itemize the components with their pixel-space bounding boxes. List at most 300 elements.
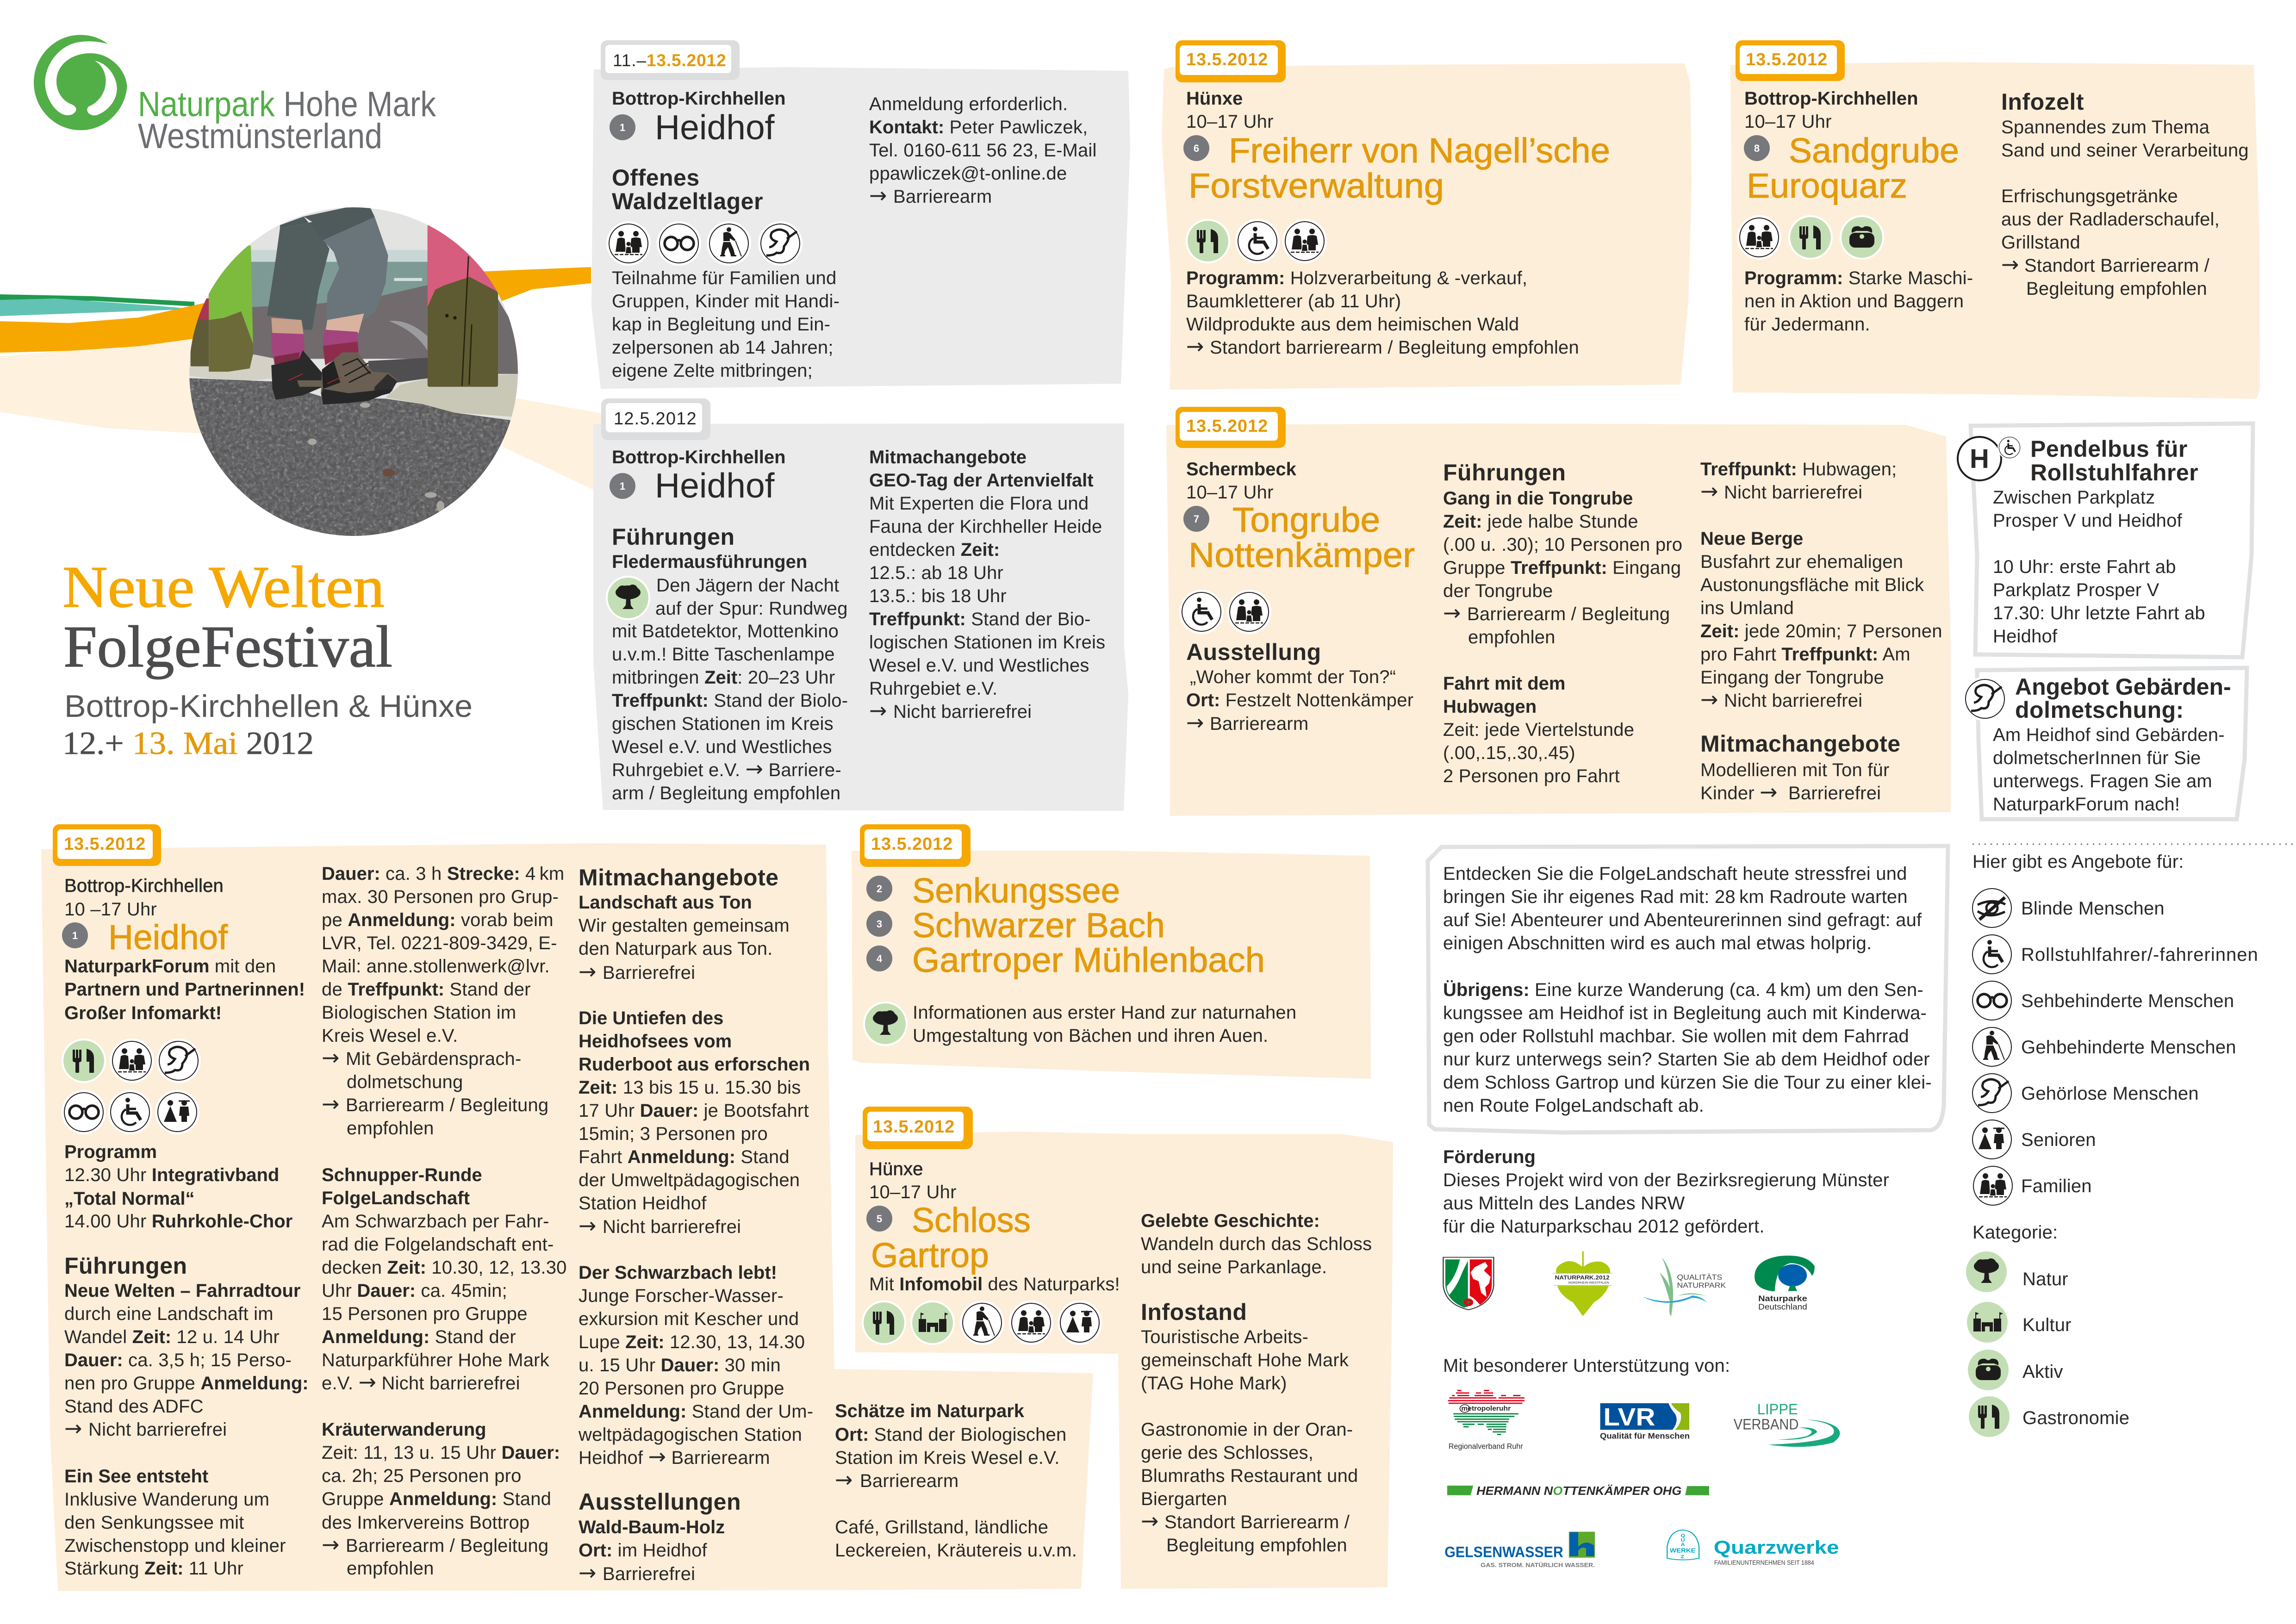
text: besondere Unterstützung: Mit besonderer Unterstützung von: bbox=[1443, 1356, 1730, 1376]
Förderung text bbox=[1443, 1147, 1889, 1237]
text block right: GEO-Tag der Artenvielfalt bbox=[869, 470, 1094, 491]
programme text bbox=[1744, 268, 1973, 335]
logo: Quarzwerke: U bbox=[1681, 1538, 1685, 1543]
number badges 2 3 4 bbox=[866, 876, 892, 971]
legend bbox=[1964, 844, 2296, 1439]
heading: Euroquarz bbox=[1747, 166, 1907, 205]
location: Bottrop-Kirchhellen bbox=[612, 447, 786, 467]
column 3 text: den Naturpark aus Ton. bbox=[579, 939, 772, 959]
intro text bbox=[64, 956, 305, 1023]
column 3 text: Der Schwarzbach lebt! bbox=[579, 1263, 777, 1283]
text: bringen Sie ihr eigenes Rad mit: 28 km Radroute warten bbox=[1443, 887, 1908, 907]
text block right: 13.5.: bis 18 Uhr bbox=[869, 586, 1007, 606]
legend item: blind bbox=[1970, 886, 2165, 930]
Treffpunkt and Neue Berge text: Barrierefrei bbox=[1788, 783, 1881, 803]
Führungen text: Zeit: jede Viertelstunde bbox=[1443, 720, 1634, 740]
text block left: zelpersonen ab 14 Jahren; bbox=[612, 337, 834, 358]
number badge 7: 7 bbox=[1194, 513, 1199, 525]
date tab bbox=[860, 824, 971, 867]
text: kungssee am Heidhof ist in Begleitung auch mit Kinderwa- bbox=[1443, 1003, 1927, 1023]
Führungen text: Gruppe Treffpunkt: Eingang bbox=[1443, 558, 1681, 578]
location and time: 10–17 Uhr bbox=[1186, 112, 1274, 132]
location and time: Hünxe bbox=[1186, 88, 1243, 109]
Treffpunkt and Neue Berge text: Mitmachangebote bbox=[1700, 731, 1901, 757]
logo: Naturparke Deutschland bbox=[1755, 1256, 1815, 1312]
date tab: 13.5.2012 bbox=[1186, 50, 1268, 69]
Führungen text bbox=[1443, 460, 1682, 786]
text: Informationen aus erster Hand zur naturnahen bbox=[913, 1002, 1296, 1023]
Programm text: 12.30 Uhr Integrativband bbox=[64, 1165, 279, 1185]
location and time: Bottrop-Kirchhellen bbox=[64, 876, 224, 896]
text block left: mitbringen Zeit: 20–23 Uhr bbox=[612, 667, 835, 688]
text: gen oder Rollstuhl machbar. Sie wollen mit dem Fahrrad bbox=[1443, 1026, 1909, 1046]
text column right: Wandeln durch das Schloss bbox=[1141, 1234, 1372, 1254]
Treffpunkt and Neue Berge text: ins Umland bbox=[1700, 598, 1794, 618]
legend heading: audiences: Hier gibt es Angebote für: bbox=[1972, 852, 2184, 872]
text: nur kurz unterwegs sein? Starten Sie ab dem Heidhof oder bbox=[1443, 1049, 1930, 1070]
text column right: Infostand bbox=[1141, 1299, 1247, 1325]
icons: family, glasses, walking, ear bbox=[606, 221, 803, 266]
dates: 12.+ 13. Mai 2012 bbox=[62, 726, 314, 761]
Treffpunkt and Neue Berge text: Nicht barrierefrei bbox=[1724, 691, 1862, 711]
column 2 text: dolmetschung bbox=[347, 1072, 463, 1092]
legend item: walking impaired: Gehbehinderte Menschen bbox=[2021, 1037, 2236, 1058]
panel: Senkungssee Schwarzer Bach Gartroper Mühlenbach bbox=[852, 824, 1371, 1079]
photo background bbox=[185, 204, 523, 541]
Schätze text: Schätze im Naturpark bbox=[835, 1401, 1025, 1421]
logo: LVR: Qualität für Menschen bbox=[1600, 1432, 1690, 1441]
icons row 1 and row 2 bbox=[62, 1039, 201, 1134]
Treffpunkt and Neue Berge text: pro Fahrt Treffpunkt: Am bbox=[1700, 644, 1910, 665]
legend item: deaf: Gehörlose Menschen bbox=[2021, 1083, 2199, 1104]
logo: Quarzwerke: A bbox=[1681, 1542, 1685, 1547]
logo: Naturparke Deutschland: Naturparke bbox=[1758, 1294, 1807, 1303]
Infozelt text: Erfrischungsgetränke bbox=[2001, 186, 2178, 206]
heading: Freiherr von Nagell’sche bbox=[1229, 131, 1610, 170]
logo: Qualitäts Naturpark: NATURPARK bbox=[1677, 1282, 1726, 1289]
subheading: Waldzeltlager bbox=[612, 188, 763, 214]
logo: Quarzwerke: Quarzwerke bbox=[1714, 1537, 1839, 1558]
column 2 text: Zeit: 11, 13 u. 15 Uhr Dauer: bbox=[322, 1443, 560, 1463]
date tab bbox=[863, 1107, 973, 1149]
logo: Lippe Verband: VERBAND bbox=[1734, 1416, 1798, 1432]
text: unterwegs. Fragen Sie am bbox=[1993, 771, 2212, 791]
text block right: Mitmachangebote bbox=[869, 447, 1027, 467]
icons: food, wheelchair, family bbox=[1186, 219, 1327, 263]
Führungen heading: Führungen bbox=[612, 524, 735, 550]
number badge 6 bbox=[1183, 135, 1209, 161]
date tab: 13.5.2012 bbox=[873, 1117, 955, 1137]
Treffpunkt and Neue Berge text: Treffpunkt: Hubwagen; bbox=[1700, 459, 1897, 479]
column 2 text: Barrierearm / Begleitung bbox=[346, 1095, 548, 1115]
legend item: deaf bbox=[1970, 1071, 2199, 1115]
heading: Schloss bbox=[912, 1201, 1031, 1239]
heading bbox=[1188, 500, 1415, 574]
logo: Naturpark Hohe Mark bbox=[34, 28, 436, 156]
text: Prosper V und Heidhof bbox=[1993, 510, 2183, 531]
date tab bbox=[53, 824, 161, 866]
column 2 text: Gruppe Anmeldung: Stand bbox=[322, 1489, 551, 1509]
legend item: culture bbox=[1965, 1300, 2072, 1344]
text: Übrigens: Eine kurze Wanderung (ca. 4 km) um den Sen- bbox=[1443, 979, 1923, 1000]
programme text: → bbox=[1186, 334, 1204, 359]
box: Gebärdendolmetschung bbox=[1963, 668, 2247, 819]
logo: LVR: LVR bbox=[1603, 1403, 1655, 1431]
Führungen text: Hubwagen bbox=[1443, 697, 1537, 717]
programme text: Standort barrierearm / Begleitung empfohlen bbox=[1210, 337, 1579, 358]
text: Am Heidhof sind Gebärden- bbox=[1993, 725, 2225, 745]
column 3 text: Ort: im Heidhof bbox=[579, 1540, 708, 1561]
logo: Lippe Verband bbox=[1734, 1401, 1840, 1447]
heading: Angebot Gebärden- bbox=[2015, 674, 2231, 700]
panel background bbox=[855, 1132, 1393, 1589]
Programm text: „Total Normal“ bbox=[64, 1188, 195, 1209]
number badge 8: 8 bbox=[1754, 143, 1760, 154]
location and time: 10–17 Uhr bbox=[1744, 112, 1832, 132]
column 2 text: Naturparkführer Hohe Mark bbox=[322, 1350, 550, 1370]
Treffpunkt and Neue Berge text: Eingang der Tongrube bbox=[1700, 667, 1884, 688]
text block left bbox=[612, 552, 848, 803]
column 2 text: LVR, Tel. 0221-809-3429, E- bbox=[322, 933, 557, 953]
text: dolmetscherInnen für Sie bbox=[1993, 748, 2201, 768]
programme text: Programm: Holzverarbeitung & -verkauf, bbox=[1186, 268, 1527, 288]
legend item: seniors: Senioren bbox=[2021, 1130, 2096, 1150]
Treffpunkt and Neue Berge text: Modellieren mit Ton für bbox=[1700, 760, 1889, 780]
location and time: 10–17 Uhr bbox=[1186, 482, 1274, 503]
column 2 text: Anmeldung: Stand der bbox=[322, 1327, 516, 1347]
Führungen text: 2 Personen pro Fahrt bbox=[1443, 766, 1620, 786]
text block right: entdecken Zeit: bbox=[869, 540, 1000, 560]
location and time bbox=[64, 876, 224, 920]
heading: Heidhof bbox=[655, 466, 775, 505]
logo swirl bbox=[34, 28, 139, 130]
date tab: 13.5.2012 bbox=[64, 834, 146, 854]
column 2 text: Kräuterwanderung bbox=[322, 1419, 486, 1440]
Infozelt text: Standort Barrierearm / bbox=[2024, 255, 2210, 276]
Schätze text: Leckereien, Kräutereis u.v.m. bbox=[835, 1540, 1077, 1561]
text block right: logischen Stationen im Kreis bbox=[869, 632, 1105, 653]
text block left: Wesel e.V. und Westliches bbox=[612, 737, 832, 757]
ribbon: teal bbox=[0, 299, 194, 316]
column 2 text: Mail: anne.stollenwerk@lvr. bbox=[322, 956, 550, 977]
heading: Forstverwaltung bbox=[1188, 166, 1444, 205]
text block right: Treffpunkt: Stand der Bio- bbox=[869, 609, 1091, 629]
Führungen text: (.00,.15,.30,.45) bbox=[1443, 743, 1575, 763]
Treffpunkt and Neue Berge text: Nicht barrierefrei bbox=[1724, 482, 1862, 503]
date tab bbox=[1176, 40, 1286, 82]
number badge 6: 6 bbox=[1194, 143, 1199, 154]
heading: Nottenkämper bbox=[1188, 535, 1415, 574]
ribbon: peach bbox=[0, 338, 602, 492]
title line 1: Neue Welten bbox=[62, 554, 385, 620]
icon: bus stop H: H bbox=[1970, 444, 1989, 474]
column 2 text: Dauer: ca. 3 h Strecke: 4 km bbox=[322, 864, 564, 884]
Programm text: Programm bbox=[64, 1142, 157, 1162]
text block right bbox=[869, 94, 1097, 208]
text: Zwischen Parkplatz bbox=[1993, 487, 2155, 508]
headings: Senkungssee bbox=[912, 871, 1120, 910]
title line 2: FolgeFestival bbox=[63, 614, 392, 679]
programme text: Baumkletterer (ab 11 Uhr) bbox=[1186, 291, 1401, 311]
Führungen text: Dauer: ca. 3,5 h; 15 Perso- bbox=[64, 1350, 292, 1370]
legend item: nature: Natur bbox=[2022, 1269, 2068, 1289]
text block right: Mit Experten die Flora und bbox=[869, 493, 1089, 514]
text: Parkplatz Prosper V bbox=[1993, 580, 2159, 600]
location and time: Schermbeck bbox=[1186, 459, 1297, 479]
column 3 text: weltpädagogischen Station bbox=[578, 1425, 802, 1445]
Ausstellung text: „Woher kommt der Ton?“ bbox=[1190, 667, 1396, 687]
panel: Heidhof Waldzeltlager bbox=[591, 40, 1130, 389]
legend item: gastronomy bbox=[1967, 1394, 2129, 1439]
text block left: auf der Spur: Rundweg bbox=[655, 598, 848, 619]
Ausstellung text: → bbox=[1186, 710, 1204, 735]
heading bbox=[2015, 674, 2231, 723]
icon: ear bbox=[1963, 677, 2007, 721]
heading: Heidhof bbox=[655, 108, 775, 147]
Führungen text: Stärkung Zeit: 11 Uhr bbox=[64, 1558, 243, 1579]
logo text: Naturpark Hohe Mark bbox=[138, 85, 436, 124]
legend item: culture: Kultur bbox=[2022, 1315, 2072, 1335]
text block left: mit Batdetektor, Mottenkino bbox=[612, 621, 839, 641]
Führungen text: Stand des ADFC bbox=[64, 1396, 204, 1417]
logo: Quarzwerke: Q bbox=[1681, 1533, 1685, 1538]
text block right: Barrierearm bbox=[893, 187, 992, 207]
Förderung text: Förderung bbox=[1443, 1147, 1536, 1167]
text block right: 12.5.: ab 18 Uhr bbox=[869, 563, 1003, 583]
legend item: visually impaired bbox=[1970, 978, 2234, 1023]
legend item: walking impaired bbox=[1970, 1025, 2236, 1069]
Führungen text: der Tongrube bbox=[1443, 581, 1553, 601]
legend item: families bbox=[1971, 1164, 2092, 1208]
Treffpunkt and Neue Berge text: → bbox=[1700, 687, 1718, 712]
Treffpunkt and Neue Berge text: → bbox=[1700, 479, 1718, 504]
column 3 text: Zeit: 13 bis 15 u. 15.30 bis bbox=[579, 1077, 801, 1098]
Führungen text: Barrierearm / Begleitung bbox=[1467, 604, 1670, 624]
location and time bbox=[1186, 459, 1297, 503]
text block right: Ruhrgebiet e.V. bbox=[869, 678, 997, 699]
box outline bbox=[1971, 423, 2253, 657]
location and time bbox=[869, 1159, 957, 1202]
Führungen text: Führungen bbox=[1443, 460, 1566, 485]
ribbon: orange left and right bbox=[0, 267, 591, 353]
text column right: Biergarten bbox=[1141, 1489, 1227, 1509]
heading: Rollstuhlfahrer bbox=[2030, 460, 2198, 485]
Infozelt text: Infozelt bbox=[2001, 89, 2084, 115]
logo: Metropole Ruhr bbox=[1448, 1390, 1524, 1450]
logo: Quarzwerke: Z bbox=[1681, 1555, 1684, 1560]
text block right: Kontakt: Peter Pawliczek, bbox=[869, 117, 1088, 137]
column 3 text: Heidhofsees vom bbox=[579, 1031, 732, 1052]
photo posts bbox=[191, 225, 498, 387]
location and time bbox=[1186, 88, 1274, 132]
column 2 text: → bbox=[322, 1045, 340, 1070]
column 2 text: Uhr Dauer: ca. 45min; bbox=[322, 1281, 507, 1301]
Führungen text: empfohlen bbox=[1468, 627, 1556, 647]
programme text bbox=[1186, 268, 1579, 359]
text column right: Blumraths Restaurant und bbox=[1141, 1466, 1358, 1486]
icons: family, food, active bbox=[1737, 215, 1884, 260]
Führungen text: Inklusive Wanderung um bbox=[64, 1489, 269, 1510]
text block right: ppawliczek@t-online.de bbox=[869, 163, 1067, 184]
text column right: (TAG Hohe Mark) bbox=[1141, 1373, 1287, 1394]
number badges 2 3 4: 2 bbox=[877, 883, 882, 895]
location and time: 10–17 Uhr bbox=[869, 1182, 957, 1202]
logo: Qualitäts Naturpark bbox=[1643, 1257, 1726, 1316]
text column right: Gelebte Geschichte: bbox=[1141, 1211, 1320, 1231]
programme text: nen in Aktion und Baggern bbox=[1744, 291, 1964, 311]
text block left: Ruhrgebiet e.V. → Barriere- bbox=[612, 756, 841, 781]
Ausstellung text bbox=[1186, 639, 1413, 735]
Führungen text: Führungen bbox=[64, 1253, 187, 1279]
date tab bbox=[601, 398, 710, 440]
logo: Naturpark 2012 leaf: NORDRHEIN-WESTFALEN bbox=[1568, 1281, 1609, 1284]
subheading bbox=[612, 165, 763, 214]
ribbons behind the photo bbox=[0, 267, 602, 492]
column 2 text: empfohlen bbox=[347, 1118, 434, 1139]
column 3 text: → bbox=[579, 1213, 597, 1238]
intro text: Großer Infomarkt! bbox=[64, 1003, 222, 1023]
number badge 1 bbox=[610, 114, 635, 140]
Infozelt text: aus der Radladerschaufel, bbox=[2001, 209, 2220, 230]
panel: Freiherr von Nagell'sche Forstverwaltung bbox=[1162, 40, 1692, 390]
column 3 text: Barrierefrei bbox=[603, 963, 695, 983]
Treffpunkt and Neue Berge text: Zeit: jede 20min; 7 Personen bbox=[1700, 621, 1942, 641]
box: Pendelbus bbox=[1958, 423, 2253, 657]
location and time: Bottrop-Kirchhellen bbox=[1744, 88, 1918, 109]
heading bbox=[1188, 131, 1610, 205]
column 3 text: 17 Uhr Dauer: je Bootsfahrt bbox=[579, 1101, 809, 1121]
column 2 text: FolgeLandschaft bbox=[322, 1188, 470, 1208]
text block left: Fledermausführungen bbox=[612, 552, 807, 572]
Führungen text: Wandel Zeit: 12 u. 14 Uhr bbox=[64, 1327, 280, 1347]
location and time: Hünxe bbox=[869, 1159, 923, 1179]
column 3 text: Station Heidhof bbox=[579, 1193, 707, 1213]
photo pebbles bbox=[308, 403, 444, 512]
text bbox=[1993, 725, 2225, 815]
Führungen text: → bbox=[1443, 600, 1461, 625]
Führungen text: → bbox=[64, 1416, 82, 1441]
text block right: → bbox=[869, 183, 887, 208]
text: Entdecken Sie die FolgeLandschaft heute stressfrei und bbox=[1443, 864, 1907, 884]
text block right: → bbox=[869, 698, 887, 723]
logo: Gelsenwasser bbox=[1444, 1532, 1595, 1568]
text column right: Begleitung empfohlen bbox=[1166, 1535, 1347, 1556]
photo: hiking boots on slag heap bbox=[185, 204, 523, 541]
number badges 2 3 4: 3 bbox=[877, 918, 882, 930]
Schätze text: Station im Kreis Wesel e.V. bbox=[835, 1448, 1060, 1468]
Ausstellung text: Barrierearm bbox=[1210, 714, 1308, 734]
column 2 text: empfohlen bbox=[347, 1558, 434, 1579]
text block left: eigene Zelte mitbringen; bbox=[612, 361, 813, 381]
panel background bbox=[852, 851, 1371, 1079]
panel background bbox=[1162, 63, 1692, 390]
Förderung text: für die Naturparkschau 2012 gefördert. bbox=[1443, 1216, 1765, 1237]
text: dem Schloss Gartrop und kürzen Sie die Tour zu einer klei- bbox=[1443, 1072, 1932, 1093]
column 3 text: Wir gestalten gemeinsam bbox=[579, 915, 790, 936]
headings: Schwarzer Bach bbox=[912, 906, 1165, 945]
column 3 text: Anmeldung: Stand der Um- bbox=[579, 1401, 813, 1422]
column 2 text: Kreis Wesel e.V. bbox=[322, 1026, 458, 1046]
column 3 text: Heidhof → Barrierearm bbox=[579, 1444, 770, 1469]
number badge 8 bbox=[1744, 135, 1770, 161]
date tab bbox=[601, 40, 740, 80]
sponsor logos bbox=[1443, 1251, 1840, 1568]
logo: Gelsenwasser: GAS. STROM. NATÜRLICH WASSER. bbox=[1481, 1562, 1595, 1568]
text column right: gerie des Schlosses, bbox=[1141, 1443, 1313, 1463]
Infozelt text: Begleitung empfohlen bbox=[2026, 279, 2207, 299]
Führungen text: Ein See entsteht bbox=[64, 1466, 208, 1487]
column 3 text: Nicht barrierefrei bbox=[603, 1217, 741, 1237]
Infozelt text bbox=[2001, 89, 2249, 299]
panel: Schloss Gartrop bbox=[855, 1107, 1393, 1589]
column 3 text: Junge Forscher-Wasser- bbox=[579, 1286, 784, 1306]
Führungen text bbox=[64, 1253, 309, 1579]
text column right: Gastronomie in der Oran- bbox=[1141, 1419, 1353, 1440]
date tab bbox=[1736, 40, 1845, 81]
column 2 text: decken Zeit: 10.30, 12, 13.30 bbox=[322, 1257, 567, 1278]
title bbox=[62, 554, 473, 761]
programme text: Wildprodukte aus dem heimischen Wald bbox=[1186, 314, 1519, 335]
text bbox=[913, 1002, 1296, 1046]
number badge 5 bbox=[866, 1206, 892, 1232]
Führungen text: Fahrt mit dem bbox=[1443, 673, 1565, 694]
text block left: arm / Begleitung empfohlen bbox=[612, 783, 840, 803]
logo: Naturparke Deutschland: Deutschland bbox=[1758, 1303, 1807, 1312]
Führungen text: Nicht barrierefrei bbox=[88, 1419, 227, 1440]
logo: Quarzwerke bbox=[1667, 1530, 1839, 1566]
Schätze text bbox=[835, 1401, 1077, 1561]
text: 10 Uhr: erste Fahrt ab bbox=[1993, 557, 2176, 577]
column 2 text: rad die Folgelandschaft ent- bbox=[322, 1234, 554, 1255]
text: Heidhof bbox=[1993, 626, 2058, 647]
column 2 text: max. 30 Personen pro Grup- bbox=[322, 887, 559, 907]
column 3 text: Landschaft aus Ton bbox=[579, 892, 752, 913]
legend item: wheelchair bbox=[1970, 932, 2259, 977]
panel: Heidhof NaturparkForum bbox=[41, 824, 1093, 1591]
icons: wheelchair, family bbox=[1179, 590, 1271, 634]
date tab: 13.5.2012 bbox=[1746, 50, 1828, 69]
location and time: 10 –17 Uhr bbox=[64, 899, 157, 920]
intro text: NaturparkForum mit den bbox=[64, 956, 276, 977]
ribbon: green bbox=[0, 294, 194, 306]
column 3 text: Die Untiefen des bbox=[579, 1008, 723, 1028]
Führungen text: Zwischenstopp und kleiner bbox=[64, 1536, 286, 1556]
number badge 1: 1 bbox=[620, 122, 625, 133]
column 2 text: des Imkervereins Bottrop bbox=[322, 1512, 529, 1533]
Förderung text: aus Mitteln des Landes NRW bbox=[1443, 1193, 1685, 1213]
column 2 text: Schnupper-Runde bbox=[322, 1165, 482, 1185]
Führungen text: Neue Welten – Fahrradtour bbox=[64, 1281, 300, 1301]
column 3 text: → bbox=[579, 1560, 597, 1585]
text block right: Nicht barrierefrei bbox=[893, 702, 1032, 722]
heading: Tongrube bbox=[1232, 500, 1380, 539]
box outline bbox=[1428, 846, 1948, 1132]
column 3 text: 15min; 3 Personen pro bbox=[579, 1124, 768, 1144]
Treffpunkt and Neue Berge text: Busfahrt zur ehemaligen bbox=[1700, 552, 1903, 572]
text block left bbox=[612, 268, 840, 381]
column 2 text bbox=[322, 864, 567, 1579]
column 3 text: Mitmachangebote bbox=[579, 865, 779, 890]
column 2 text: ca. 2h; 25 Personen pro bbox=[322, 1466, 522, 1486]
Schätze text: Café, Grillstand, ländliche bbox=[835, 1517, 1048, 1537]
column 2 text: 15 Personen pro Gruppe bbox=[322, 1304, 528, 1324]
panel: Heidhof 12.5. bbox=[593, 398, 1128, 811]
Schätze text: Ort: Stand der Biologischen bbox=[835, 1425, 1066, 1445]
text bbox=[1993, 487, 2205, 647]
column 3 text: → bbox=[579, 959, 597, 984]
Treffpunkt and Neue Berge text bbox=[1700, 459, 1942, 804]
logo: Naturpark 2012 leaf bbox=[1553, 1251, 1613, 1316]
